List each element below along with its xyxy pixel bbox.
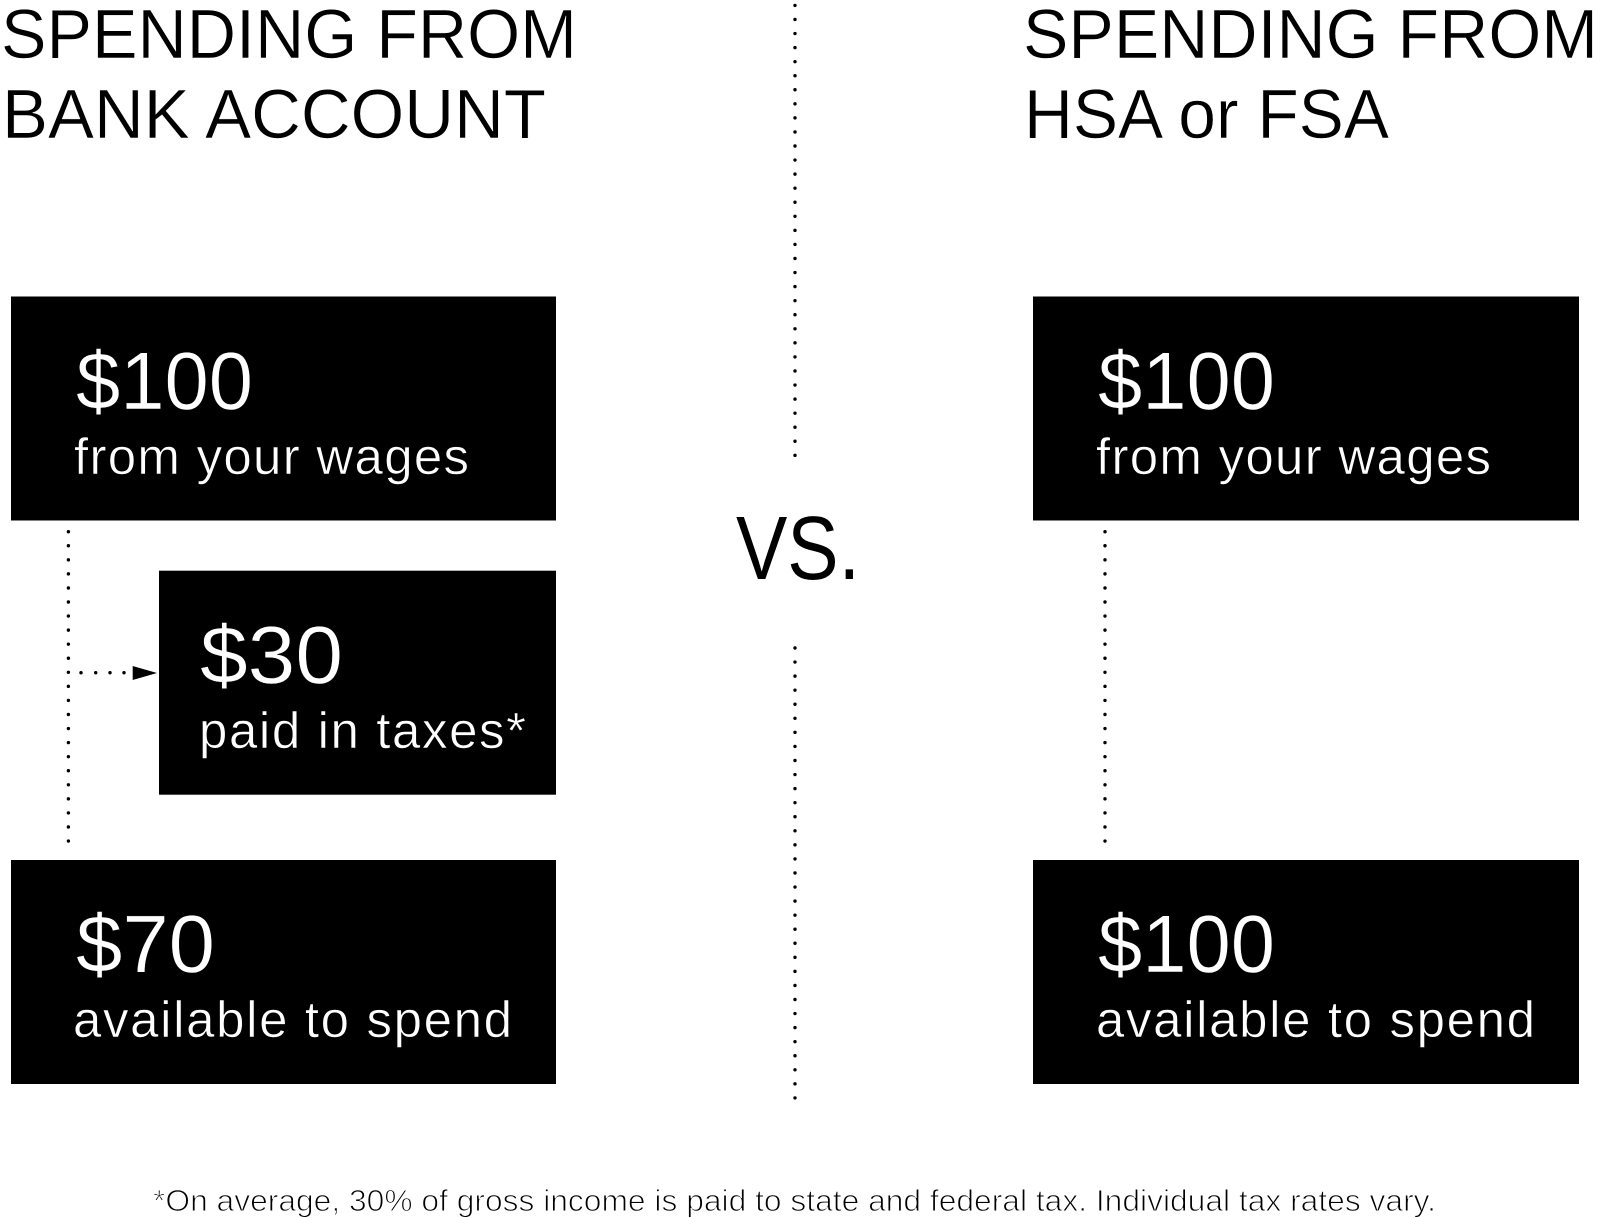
box: $100 available to spend [1033,860,1579,1084]
box: $70 available to spend [11,860,556,1084]
heading: spending from bank account [1,0,577,153]
footnote: *On average, 30% of gross income is paid to state and federal tax. Individual tax rates vary. [153,1183,1436,1218]
box: $100 from your wages: $100 [1098,336,1275,427]
label: vs.: VS. [736,499,860,599]
box: $70 available to spend: $70 [76,899,215,990]
heading: spending from bank account: BANK ACCOUNT [2,75,546,153]
box: $70 available to spend: available to spend [73,991,512,1048]
box: $100 from your wages [1033,296,1579,520]
panel: spending from HSA or FSA [1023,0,1598,1084]
dotted connector: wages to spend [67,532,70,843]
box: $100 from your wages: from your wages [74,428,469,485]
arrow: dotted branch to taxes [79,666,157,680]
box: $100 from your wages [11,296,556,520]
heading: spending from HSA or FSA [1023,0,1598,153]
box: $30 paid in taxes: paid in taxes* [199,702,526,759]
box: $30 paid in taxes [159,571,556,795]
heading: spending from HSA or FSA: HSA or FSA [1024,75,1389,153]
box: $100 from your wages: $100 [76,336,253,427]
box: $100 from your wages: from your wages [1096,428,1491,485]
box: $100 available to spend: $100 [1098,899,1275,990]
panel: spending from bank account [1,0,577,1084]
dotted connector: wages to spend [1103,532,1107,843]
divider: lower dotted line [793,648,797,1104]
divider: upper dotted line [793,5,797,458]
box: $30 paid in taxes: $30 [200,610,343,701]
box: $100 available to spend: available to spend [1096,991,1535,1048]
